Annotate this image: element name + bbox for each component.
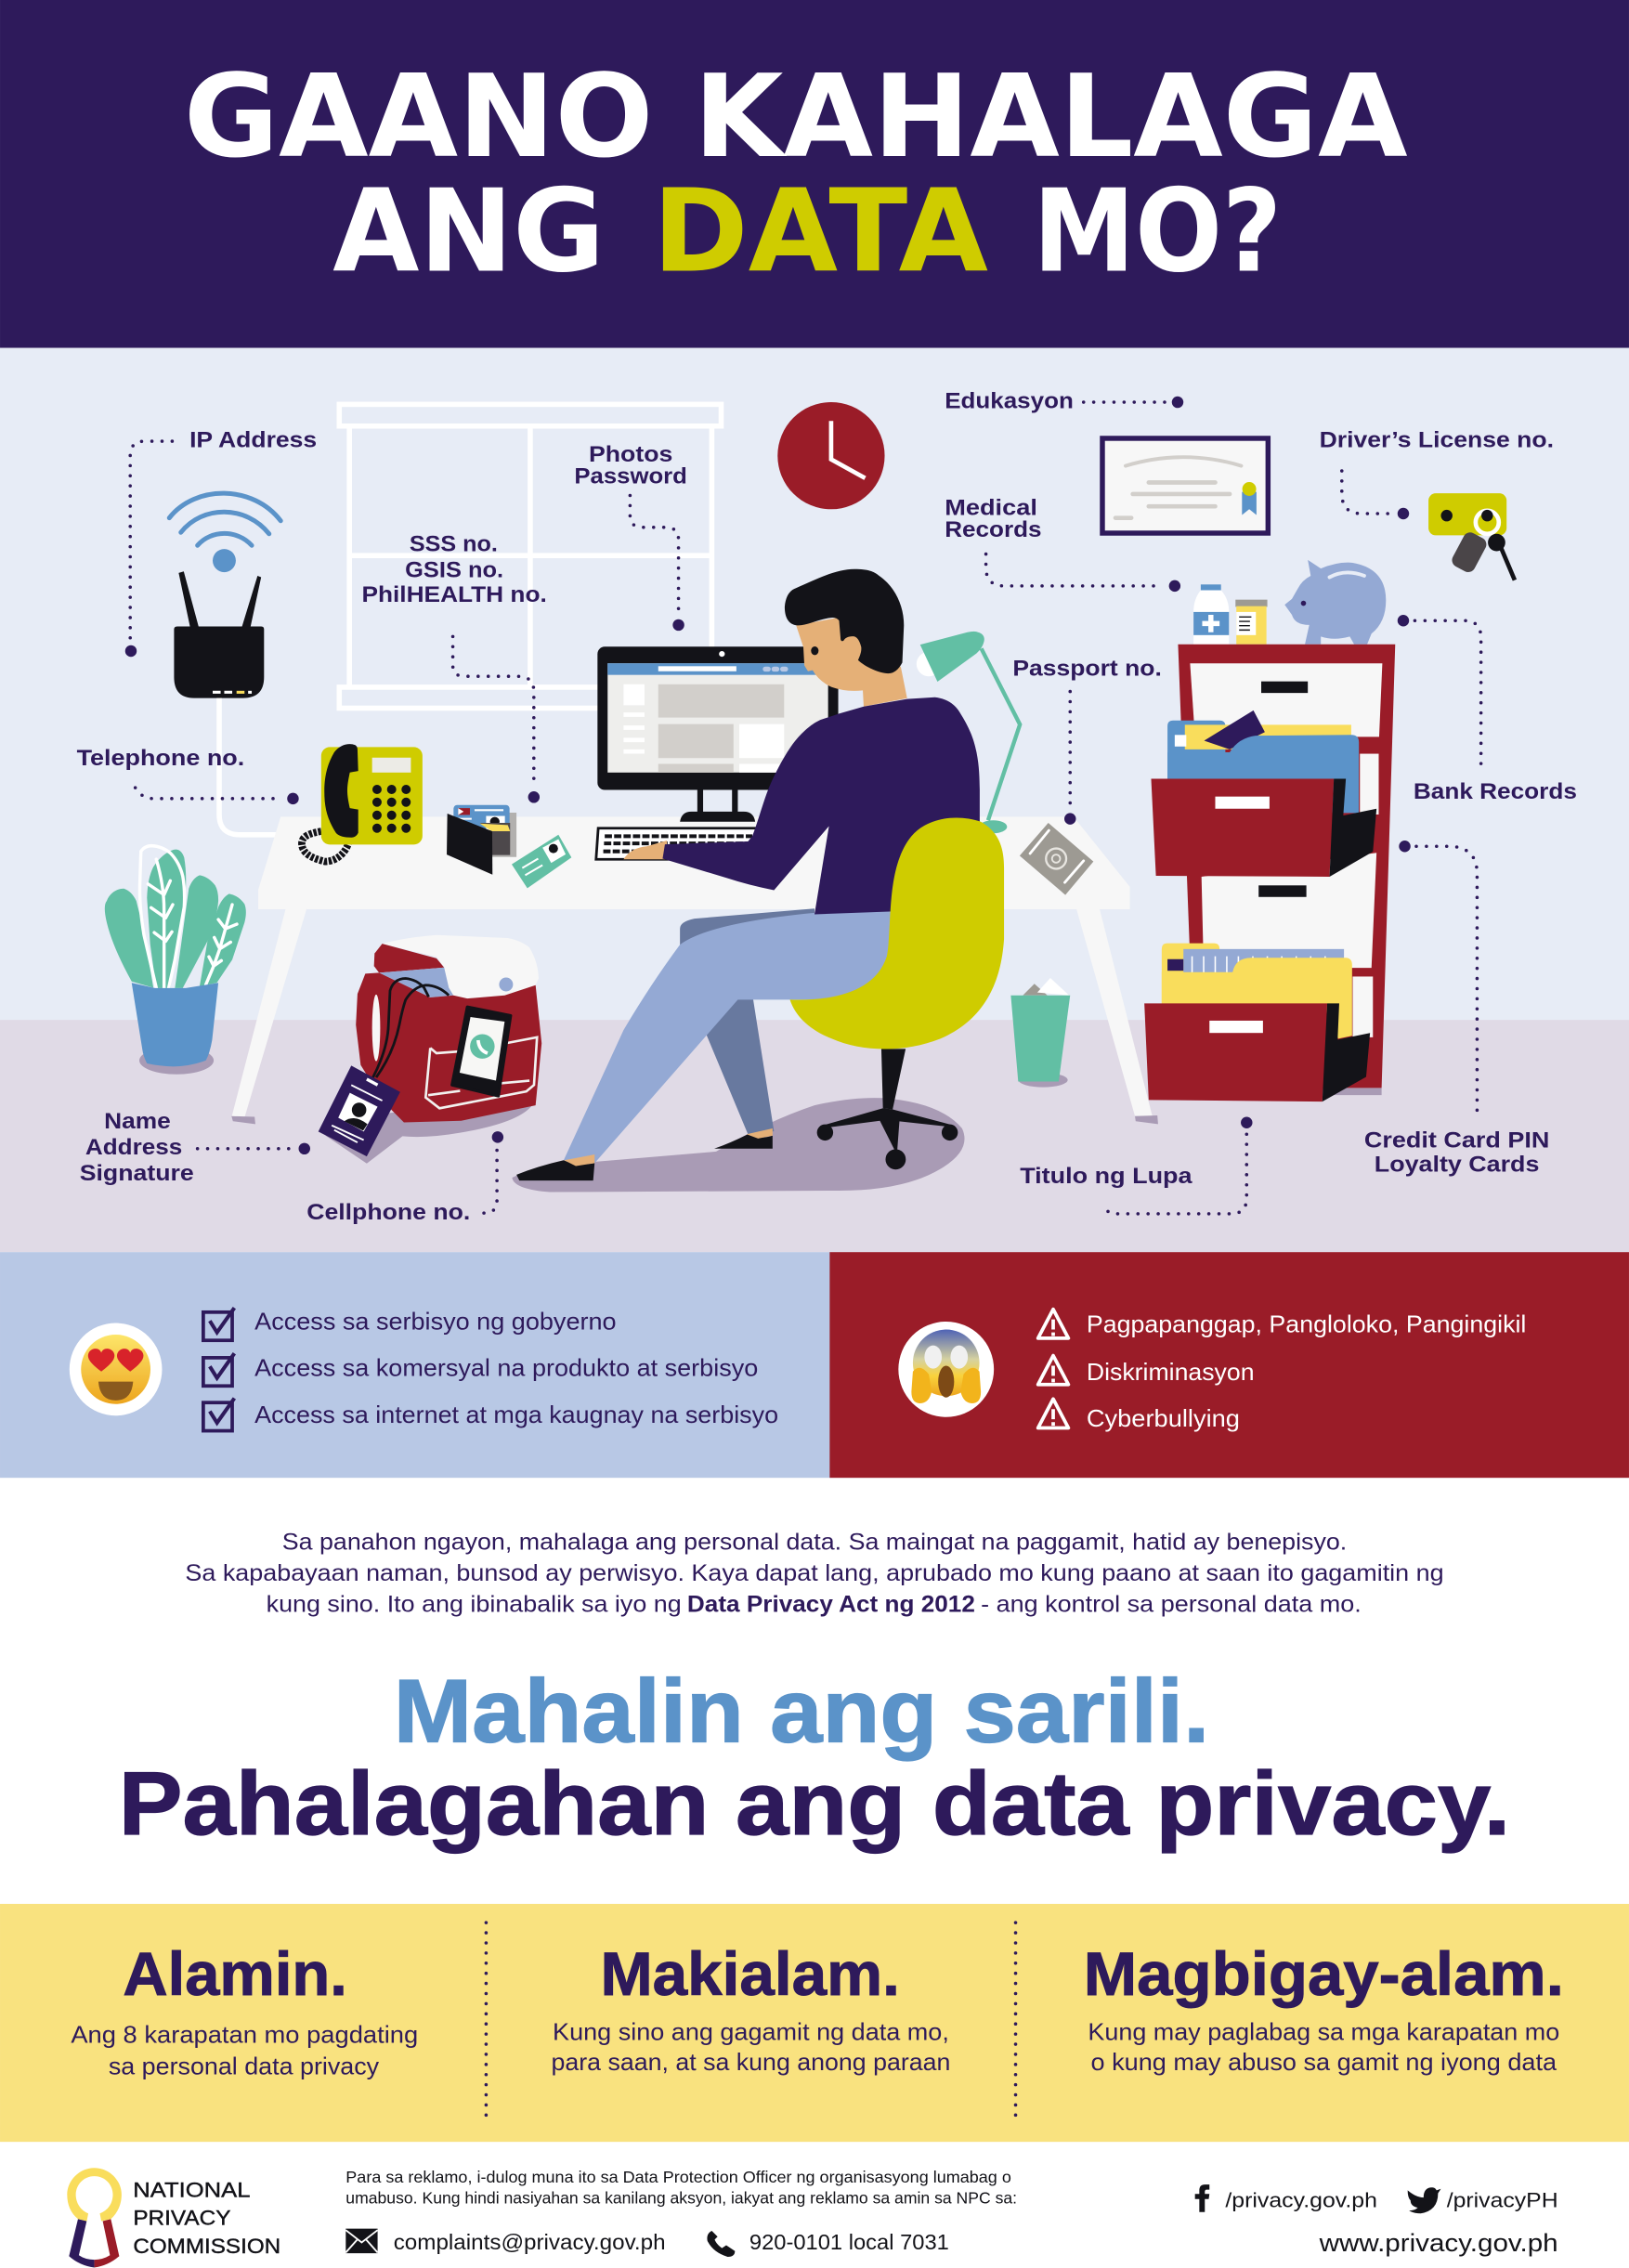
column: Magbigay-alam: o kung may abuso sa gamit ng iyong data <box>1091 2050 1557 2076</box>
intro paragraph: Sa kapabayaan naman, bunsod ay perwisyo. Kaya dapat lang, aprubado mo kung paano at saan ito gagamitin ng <box>185 1560 1444 1586</box>
tagline <box>119 1662 1510 1854</box>
column: Magbigay-alam: Kung may paglabag sa mga karapatan mo <box>1088 2019 1559 2045</box>
column: Alamin: sa personal data privacy <box>109 2054 379 2080</box>
column: Magbigay-alam: Magbigay-alam. <box>1084 1940 1564 2008</box>
icon: checkbox 2 <box>203 1353 234 1386</box>
callout: Titulo ng Lupa <box>1020 1117 1253 1214</box>
icon: screaming emoji <box>898 1322 994 1417</box>
passport <box>1020 823 1093 895</box>
risks list: Cyberbullying <box>1087 1406 1240 1432</box>
intro paragraph: - ang kontrol sa personal data mo. <box>981 1591 1362 1617</box>
callout: Credit Card PIN, Loyalty Cards: Loyalty Cards <box>1375 1153 1539 1178</box>
callout: Telephone no. <box>77 746 299 804</box>
social: Twitter: /privacyPH <box>1447 2188 1558 2211</box>
window <box>339 404 722 708</box>
callout: Driver's License no. <box>1320 427 1554 519</box>
floor shadow under chair <box>512 1098 965 1193</box>
icon: warning 1 <box>1038 1310 1068 1338</box>
column: Makialam: Kung sino ang gagamit ng data mo, <box>553 2019 949 2045</box>
column: Magbigay-alam <box>1084 1940 1564 2076</box>
callout: Titulo ng Lupa: Titulo ng Lupa <box>1020 1164 1192 1189</box>
callout: Edukasyon <box>945 388 1183 413</box>
logo: National Privacy Commission: COMMISSION <box>133 2235 280 2258</box>
filing cabinet <box>1144 645 1395 1101</box>
column: Makialam: Makialam. <box>600 1940 900 2008</box>
callout: Photos, Password: Photos <box>589 442 672 467</box>
callout: SSS, GSIS, PhilHEALTH <box>361 531 547 803</box>
callout: Cellphone no.: Cellphone no. <box>306 1200 470 1225</box>
callout: Passport no. <box>1012 656 1162 825</box>
icon: smartphone <box>452 1007 511 1096</box>
intro paragraph: Sa panahon ngayon, mahalaga ang personal data. Sa maingat na paggamit, hatid ay benepisyo. <box>282 1529 1347 1555</box>
callout: Name, Address, Signature: Signature <box>80 1161 194 1186</box>
column: Makialam <box>551 1940 950 2076</box>
callout: Photos, Password <box>574 442 687 631</box>
callout: Name, Address, Signature <box>80 1109 310 1186</box>
potted plant <box>105 846 246 1075</box>
contact: email: complaints@privacy.gov.ph <box>394 2230 666 2254</box>
benefits checklist: Access sa internet at mga kaugnay na serbisyo <box>254 1402 778 1428</box>
computer monitor <box>597 646 839 822</box>
benefits checklist: Access sa komersyal na produkto at serbisyo <box>254 1355 758 1381</box>
title: MO? <box>1033 165 1282 298</box>
shoes <box>516 1134 773 1180</box>
callout: SSS, GSIS, PhilHEALTH: GSIS no. <box>405 558 503 583</box>
pocket outline <box>425 1037 537 1108</box>
callout: Medical Records <box>945 496 1180 592</box>
benefits checklist <box>203 1308 778 1431</box>
icon: wifi router <box>169 493 280 835</box>
risks list: Diskriminasyon <box>1087 1360 1255 1386</box>
social: Facebook <box>1195 2184 1377 2212</box>
office chair <box>790 817 1004 1169</box>
panel: header banner <box>0 0 1629 348</box>
complaint instructions <box>345 2168 1017 2207</box>
social: Facebook: /privacy.gov.ph <box>1225 2188 1377 2211</box>
complaint instructions: umabuso. Kung hindi nasiyahan sa kanilang aksyon, iakyat ang reklamo sa amin sa NPC sa: <box>345 2188 1017 2207</box>
icon: green ID card <box>512 835 571 888</box>
risks list: Pagpapanggap, Pangloloko, Pangingikil <box>1087 1312 1526 1338</box>
logo: National Privacy Commission <box>67 2168 280 2268</box>
framed certificate <box>1102 438 1268 533</box>
tagline: Pahalagahan ang data privacy. <box>119 1754 1510 1854</box>
icon: warning 3 <box>1038 1399 1068 1427</box>
callout: IP Address <box>125 427 317 657</box>
callout: IP Address: IP Address <box>189 427 317 452</box>
icon: car keys on holder <box>1428 493 1515 580</box>
callout: Name, Address, Signature: Address <box>85 1135 182 1160</box>
callout: Edukasyon: Edukasyon <box>945 388 1074 413</box>
panel: risks <box>829 1252 1629 1478</box>
icon: wall clock <box>777 402 885 509</box>
callout: Bank Records <box>1398 615 1577 804</box>
panel: benefits <box>0 1252 830 1478</box>
torso and arm <box>662 697 980 914</box>
hand <box>623 841 667 859</box>
desk lamp <box>917 632 1020 833</box>
callout: Name, Address, Signature: Name <box>104 1109 171 1134</box>
website: www.privacy.gov.ph <box>1319 2229 1558 2257</box>
icon: piggy bank <box>1284 560 1386 645</box>
panel: call to action band <box>0 1904 1629 2142</box>
person at desk <box>516 569 980 1180</box>
callout: Medical Records: Records <box>945 517 1042 542</box>
icon: heart-eyes emoji <box>70 1323 162 1415</box>
lower open drawer with land titles <box>1144 944 1370 1101</box>
icon: wallet with IDs <box>447 805 571 888</box>
callout: SSS, GSIS, PhilHEALTH: PhilHEALTH no. <box>361 582 547 607</box>
intro paragraph: Data Privacy Act ng 2012 <box>687 1591 975 1617</box>
tagline: Mahalin ang sarili. <box>394 1662 1209 1761</box>
trash bin <box>1010 978 1070 1088</box>
hair <box>785 569 904 673</box>
column: Alamin: Alamin. <box>123 1940 347 2008</box>
neck and face <box>796 615 907 707</box>
title: DATA <box>653 165 988 298</box>
intro paragraph: kung sino. Ito ang ibinabalik sa iyo ng <box>267 1591 682 1617</box>
title: ANG <box>332 165 605 298</box>
keyboard <box>596 828 758 859</box>
logo: National Privacy Commission: PRIVACY <box>133 2207 231 2230</box>
callout: Cellphone no. <box>306 1131 503 1225</box>
column: Makialam: para saan, at sa kung anong paraan <box>551 2050 950 2076</box>
ID lanyard card <box>319 1065 400 1156</box>
callout: Medical Records: Medical <box>945 496 1037 521</box>
upper open drawer with bank documents <box>1151 710 1376 877</box>
intro paragraph <box>185 1529 1444 1617</box>
callout: Photos, Password: Password <box>574 463 687 489</box>
footer <box>67 2168 1558 2268</box>
column: Alamin: Ang 8 karapatan mo pagdating <box>71 2022 418 2048</box>
benefits checklist: Access sa serbisyo ng gobyerno <box>254 1310 617 1336</box>
icon: checkbox 3 <box>203 1399 234 1431</box>
desk <box>231 816 1158 1124</box>
callout: Credit Card PIN, Loyalty Cards <box>1364 841 1549 1178</box>
risks list <box>1038 1310 1526 1432</box>
icon: warning 2 <box>1038 1356 1068 1385</box>
icon: medicine bottles <box>1193 584 1268 645</box>
legs <box>564 908 893 1163</box>
contact: phone: 920-0101 local 7031 <box>749 2230 949 2254</box>
callout: Telephone no.: Telephone no. <box>77 746 244 771</box>
icon: desk telephone <box>302 744 423 862</box>
social: Twitter <box>1408 2187 1558 2213</box>
callout: SSS, GSIS, PhilHEALTH: SSS no. <box>410 531 498 556</box>
callout: Passport no.: Passport no. <box>1012 656 1162 681</box>
column: Alamin <box>71 1940 418 2080</box>
panel: office illustration <box>0 348 1629 1252</box>
callout: Driver's License no.: Driver’s License no. <box>1320 427 1554 452</box>
callout: Bank Records: Bank Records <box>1414 779 1577 804</box>
title: GAANO KAHALAGA <box>184 51 1408 184</box>
title <box>184 51 1408 298</box>
logo: National Privacy Commission: NATIONAL <box>133 2178 250 2201</box>
callout: Credit Card PIN, Loyalty Cards: Credit Card PIN <box>1364 1127 1549 1153</box>
complaint instructions: Para sa reklamo, i-dulog muna ito sa Data Protection Officer ng organisasyong lumabag o <box>345 2168 1011 2186</box>
icon: checkbox 1 <box>203 1308 234 1340</box>
tote bag with phone and ID <box>319 935 541 1164</box>
